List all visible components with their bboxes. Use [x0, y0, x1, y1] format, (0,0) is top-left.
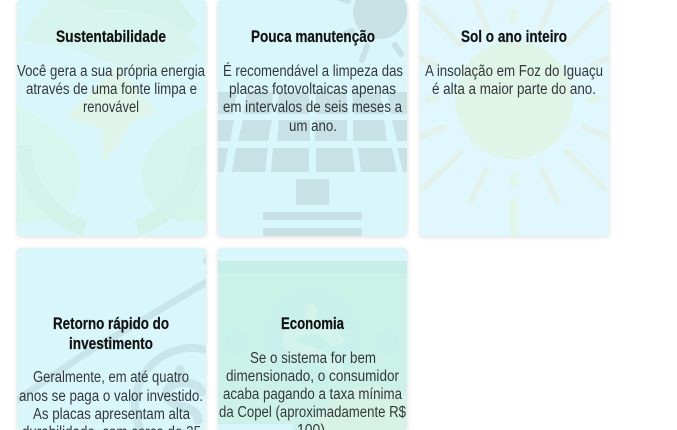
panel: economia	[216, 248, 408, 430]
heading: Sol o ano inteiro	[461, 27, 567, 46]
text block: anos se paga o valor investido.	[19, 388, 203, 405]
icon: solar panel and sun	[218, 0, 407, 236]
text block: É recomendável a limpeza das	[223, 63, 403, 80]
text block	[19, 369, 203, 430]
text block	[219, 350, 406, 430]
text block	[17, 63, 205, 116]
icon: banknote	[218, 261, 407, 430]
text block: Geralmente, em até quatro	[33, 369, 189, 386]
text block	[223, 63, 403, 135]
heading: Economia	[281, 314, 344, 333]
text block: em intervalos de seis meses a	[223, 99, 402, 116]
text block: um ano.	[289, 118, 337, 135]
icon: sun	[415, 0, 613, 240]
heading	[53, 314, 169, 353]
text block: A insolação em Foz do Iguaçu	[425, 63, 603, 80]
icon: growth line and coin	[17, 257, 206, 430]
heading: Retorno rápido do	[53, 314, 169, 333]
text block: dimensionado, o consumidor	[226, 368, 399, 385]
panel: sustentabilidade	[17, 0, 206, 236]
text block: placas fotovoltaicas apenas	[229, 81, 396, 98]
text block: da Copel (aproximadamente R$	[219, 404, 406, 421]
heading: investimento	[69, 334, 153, 353]
text block: Você gera a sua própria energia	[17, 63, 205, 80]
heading: Sustentabilidade	[56, 27, 166, 46]
text block: é alta a maior parte do ano.	[432, 81, 596, 98]
text block: através de uma fonte limpa e	[26, 81, 197, 98]
panel: sol o ano inteiro	[415, 0, 613, 240]
text block: As placas apresentam alta	[33, 406, 190, 423]
text block: renovável	[83, 99, 139, 116]
text block: Se o sistema for bem	[250, 350, 376, 367]
text block	[425, 63, 603, 98]
text block: acaba pagando a taxa mínima	[223, 386, 402, 403]
icon: recycling arrows	[17, 0, 206, 228]
heading: Pouca manutenção	[251, 27, 375, 46]
panel: pouca manutenção	[218, 0, 407, 236]
panel: retorno rápido	[16, 248, 208, 430]
